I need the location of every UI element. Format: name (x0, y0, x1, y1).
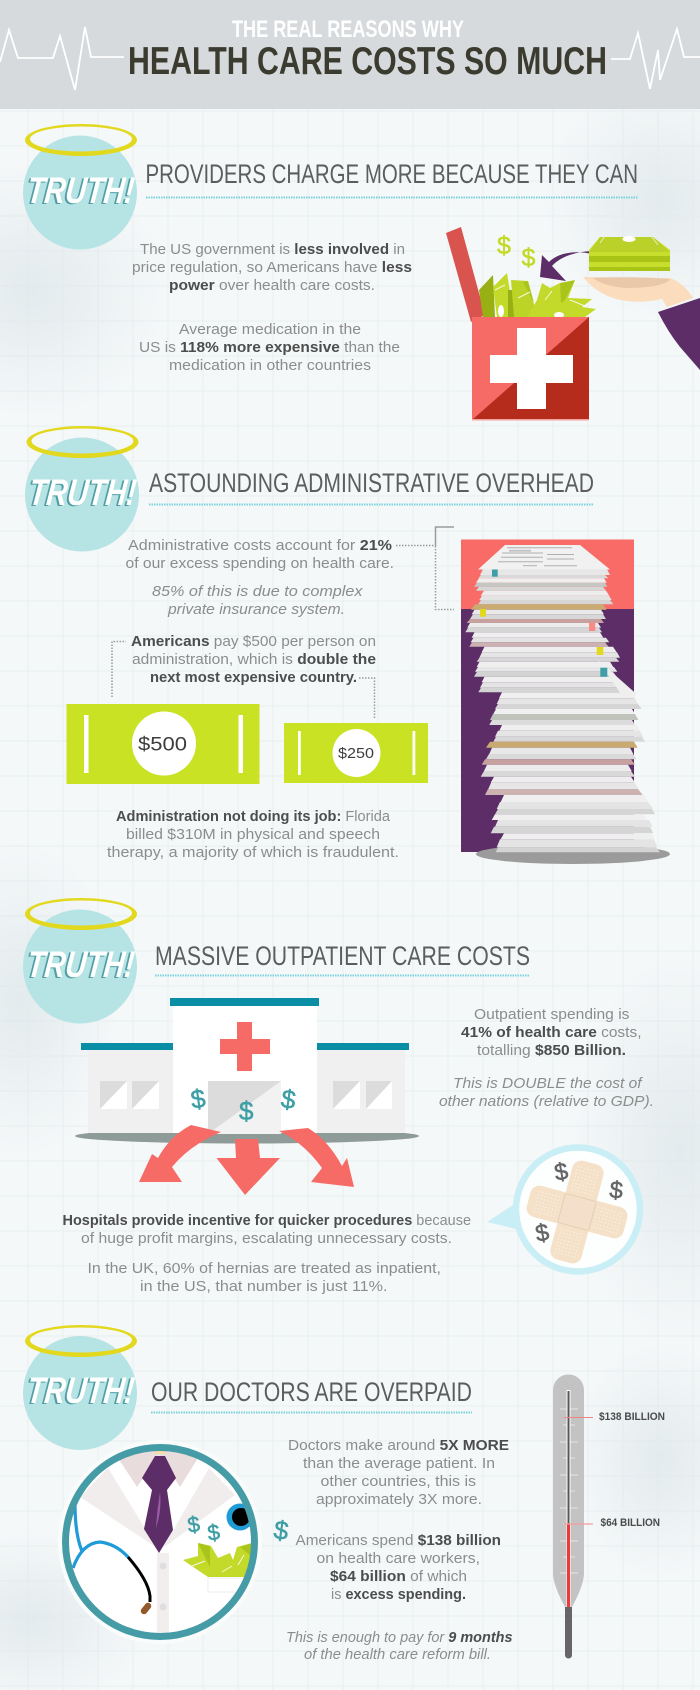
illustration: first aid kit with money: $ (522, 244, 536, 272)
connectors to bills (112, 642, 374, 718)
truth badge (23, 124, 137, 250)
text block: hospitals: Hospitals provide incentive for quicker procedures because (62, 1213, 471, 1229)
text block: hospitals: In the UK, 60% of hernias are treated as inpatient, (88, 1261, 441, 1277)
truth badge (23, 898, 137, 1024)
text block: reform bill: This is enough to pay for 9 months (286, 1630, 512, 1646)
chart: thermometer (553, 1374, 665, 1659)
text block: outpatient spending: other nations (relative to GDP). (439, 1094, 654, 1110)
arrows out of hospital (139, 1125, 354, 1195)
truth badge: TRUTH! (27, 471, 139, 513)
text block: medication: medication in other countries (169, 358, 371, 374)
text block: americans pay: next most expensive country. (150, 670, 357, 686)
illustration: hospital (75, 998, 419, 1144)
icon: bandage speech bubble: $ (533, 1219, 551, 1248)
illustration: first aid kit with money: $ (497, 232, 511, 260)
title line 1: THE REAL REASONS WHY (232, 16, 464, 43)
text block: reform bill: of the health care reform bill. (304, 1647, 491, 1663)
illustration: first aid kit with money (446, 227, 700, 420)
text block: americans pay: administration, which is double the (132, 652, 376, 668)
heartbeat line left (0, 27, 124, 90)
label: $64 billion: $64 BILLION (600, 1517, 660, 1529)
text block: doctors make: Doctors make around 5X MORE (288, 1438, 509, 1454)
text block: outpatient spending: Outpatient spending is (474, 1007, 630, 1023)
text block: regulation: The US government is less involved in (140, 242, 405, 258)
truth badge: TRUTH! (25, 169, 137, 211)
text block: americans spend: on health care workers, (316, 1551, 480, 1567)
text block: americans pay: Americans pay $500 per person on (131, 634, 376, 650)
header banner (0, 0, 700, 109)
text block: medication (139, 322, 400, 374)
illustration: doctor medallion: $ (206, 1519, 221, 1546)
text block: 21%: of our excess spending on health care. (126, 556, 394, 572)
text block: regulation (132, 242, 412, 294)
truth badge: TRUTH! (23, 944, 135, 986)
truth badge: TRUTH! (25, 1369, 137, 1411)
text block: regulation: power over health care costs. (169, 278, 375, 294)
text block: americans spend: $64 billion of which (330, 1569, 467, 1585)
text block: doctors make (288, 1438, 509, 1508)
text block: hospitals (62, 1213, 471, 1295)
illustration: doctor medallion (58, 1440, 262, 1644)
label: $138 billion: $138 BILLION (599, 1411, 665, 1423)
text block: regulation: price regulation, so Americans have less (132, 260, 412, 276)
bill: $250: $250 (338, 746, 374, 762)
bill: $500 (66, 704, 260, 784)
text block: outpatient spending: totalling $850 Billion. (477, 1043, 626, 1059)
truth badge (25, 426, 139, 552)
section 1: providers charge more (23, 124, 700, 420)
text block: hospitals: of huge profit margins, escalating unnecessary costs. (81, 1231, 452, 1247)
section 2: administrative overhead (25, 426, 670, 864)
text block: reform bill (286, 1630, 512, 1663)
section 4: doctors overpaid (23, 1325, 665, 1663)
text block: doctors make: than the average patient. In (303, 1456, 495, 1472)
text block: administration: billed $310M in physical and speech (126, 827, 380, 843)
icon: bandage speech bubble: $ (552, 1158, 570, 1187)
text block: 21% (126, 538, 394, 618)
illustration: paper stack (461, 540, 670, 864)
text block: americans spend (296, 1533, 501, 1603)
section 3: outpatient care (23, 898, 654, 1295)
truth badge: TRUTH! (25, 943, 137, 985)
text block: americans spend: is excess spending. (331, 1587, 466, 1603)
illustration: hospital: $ (239, 1096, 254, 1126)
text block: outpatient spending: 41% of health care costs, (461, 1025, 642, 1041)
text block: doctors make: approximately 3X more. (316, 1492, 482, 1508)
text block: administration (107, 809, 399, 861)
icon: bandage speech bubble (487, 1148, 640, 1274)
text block: hospitals: in the US, that number is just 11%. (140, 1279, 388, 1295)
text block: administration: therapy, a majority of which is fraudulent. (107, 845, 399, 861)
text block: 21%: private insurance system. (167, 602, 345, 618)
bill: $250 (284, 723, 428, 783)
truth badge: TRUTH! (25, 472, 137, 514)
truth badge: TRUTH! (23, 1370, 135, 1412)
heading: OUR DOCTORS ARE OVERPAID (151, 1377, 472, 1407)
icon: bandage speech bubble: $ (608, 1177, 624, 1205)
illustration: hospital: $ (189, 1083, 208, 1115)
truth badge (23, 1325, 137, 1450)
heading: MASSIVE OUTPATIENT CARE COSTS (155, 941, 530, 971)
text block: outpatient spending: This is DOUBLE the cost of (453, 1076, 644, 1092)
icon: dollar sign: $ (272, 1514, 291, 1546)
illustration: doctor medallion: $ (186, 1511, 201, 1538)
text block: 21%: 85% of this is due to complex (152, 584, 363, 600)
text block: doctors make: other countries, this is (320, 1474, 476, 1490)
text block: medication: Average medication in the (179, 322, 361, 338)
heartbeat line right (611, 29, 700, 89)
truth badge: TRUTH! (23, 170, 135, 212)
text block: americans spend: Americans spend $138 billion (296, 1533, 501, 1549)
text block: 21%: Administrative costs account for 21% (128, 538, 392, 554)
text block: americans pay (131, 634, 376, 686)
text block: medication: US is 118% more expensive than the (139, 340, 400, 356)
text block: administration: Administration not doing its job: Florida (116, 809, 391, 825)
connector: 21% to stack (396, 527, 454, 610)
bill: $500: $500 (138, 734, 187, 756)
text block: outpatient spending (439, 1007, 654, 1110)
illustration: hospital: $ (279, 1083, 298, 1115)
